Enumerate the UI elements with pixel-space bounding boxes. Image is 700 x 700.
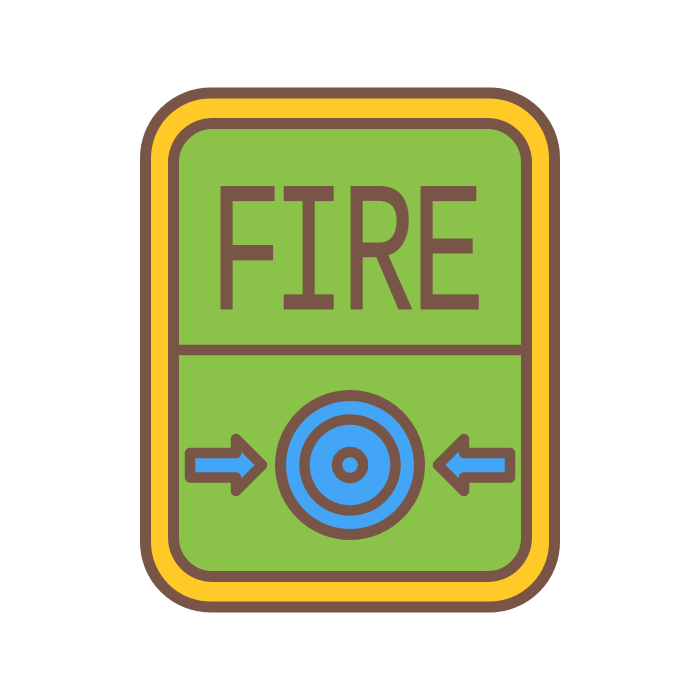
arrow: left pointing right <box>190 439 262 491</box>
heading: FIRE: FIRE <box>209 156 485 366</box>
icon: push button <box>280 396 420 534</box>
panel: green inner face <box>174 124 526 576</box>
panel: yellow outer casing <box>146 93 554 607</box>
arrow: right pointing left <box>438 439 510 491</box>
